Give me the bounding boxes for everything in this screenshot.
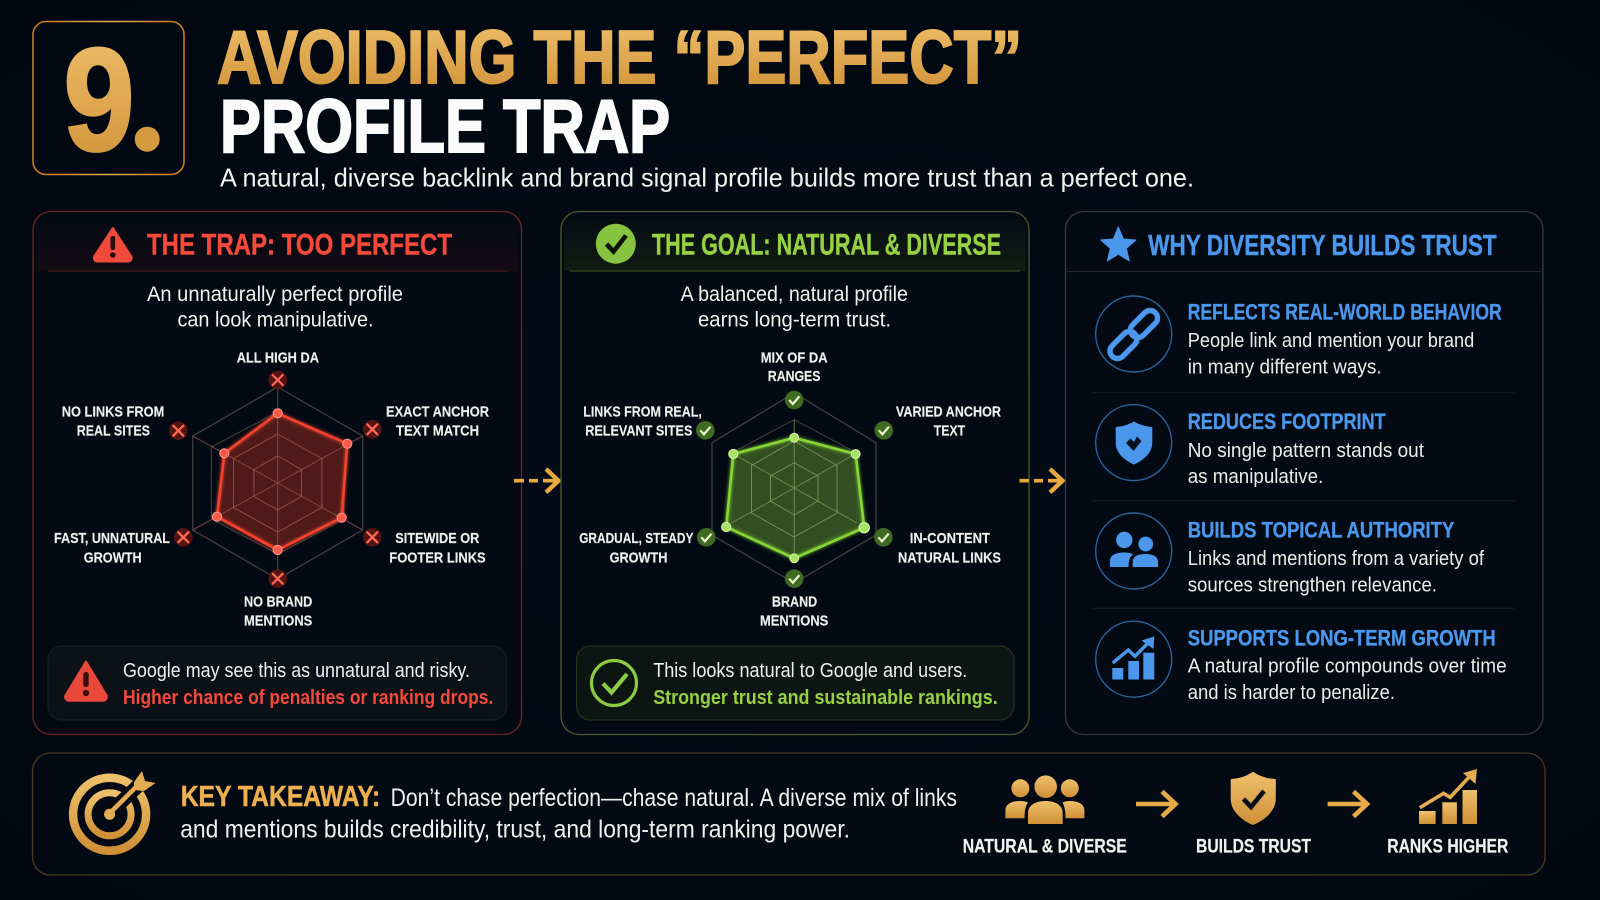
radar labels: MENTIONS	[760, 613, 828, 630]
item: builds topical authority: Links and mentions from a variety of	[1188, 547, 1484, 570]
heading: THE GOAL: NATURAL & DIVERSE	[652, 228, 1001, 261]
item: reflects real-world behavior: People link and mention your brand	[1188, 329, 1474, 352]
radar labels: GRADUAL, STEADY	[579, 530, 693, 547]
panel: why diversity builds trust	[1066, 212, 1543, 734]
icon: warning triangle	[94, 228, 132, 262]
arrow: to builds trust	[1136, 792, 1176, 816]
radar labels: FOOTER LINKS	[389, 549, 486, 566]
radar chart: too perfect	[193, 387, 363, 579]
x markers	[169, 371, 382, 588]
step: ranks higher	[1387, 769, 1509, 858]
intro text: An unnaturally perfect profile	[147, 283, 403, 306]
icon: star	[1101, 227, 1136, 261]
number badge: 9	[64, 18, 134, 181]
radar labels: REAL SITES	[77, 423, 150, 440]
title: PROFILE TRAP	[220, 84, 670, 168]
radar labels: NO BRAND	[244, 594, 312, 611]
title	[217, 15, 1022, 168]
item: builds topical authority: sources strengthen relevance.	[1188, 574, 1437, 597]
panel: key takeaway	[32, 753, 1545, 875]
icon: check circle	[596, 224, 636, 264]
step: natural and diverse	[963, 775, 1127, 858]
item: reduces footprint: REDUCES FOOTPRINT	[1188, 409, 1386, 434]
radar labels: EXACT ANCHOR	[386, 403, 489, 420]
item: reduces footprint	[1096, 405, 1424, 488]
item: reduces footprint: as manipulative.	[1188, 465, 1323, 488]
item: supports long-term growth: SUPPORTS LONG-TERM GROWTH	[1188, 625, 1496, 650]
item: builds topical authority	[1096, 513, 1484, 597]
callout: natural: This looks natural to Google and users.	[653, 660, 967, 682]
icon: growth chart	[1096, 621, 1172, 697]
radar labels: SITEWIDE OR	[395, 530, 479, 547]
step: builds trust	[1196, 772, 1311, 858]
radar labels: RANGES	[768, 368, 820, 385]
intro text: A balanced, natural profile	[681, 283, 908, 306]
step: builds trust: BUILDS TRUST	[1196, 837, 1311, 858]
number badge	[33, 18, 184, 181]
icon: chain link	[1096, 296, 1172, 372]
icon: target with arrow	[73, 771, 156, 851]
radar labels: IN-CONTENT	[910, 530, 990, 547]
radar labels: TEXT MATCH	[396, 423, 479, 440]
radar labels: RELEVANT SITES	[585, 423, 692, 440]
takeaway text: and mentions builds credibility, trust, and long-term ranking power.	[180, 815, 850, 843]
step: ranks higher: RANKS HIGHER	[1387, 837, 1509, 858]
callout: natural	[576, 646, 1014, 720]
radar labels: NO LINKS FROM	[62, 403, 164, 420]
item: builds topical authority: BUILDS TOPICAL AUTHORITY	[1188, 517, 1454, 542]
radar labels: BRAND	[772, 594, 817, 611]
item: supports long-term growth: and is harder to penalize.	[1188, 681, 1395, 704]
item: reflects real-world behavior	[1096, 296, 1502, 379]
radar labels	[54, 349, 489, 630]
radar labels: NATURAL LINKS	[898, 549, 1001, 566]
radar labels: MIX OF DA	[761, 349, 828, 366]
intro text: can look manipulative.	[178, 309, 374, 332]
item: reflects real-world behavior: REFLECTS REAL-WORLD BEHAVIOR	[1188, 300, 1502, 325]
check markers	[696, 391, 893, 588]
radar labels: TEXT	[934, 423, 965, 440]
heading: THE TRAP: TOO PERFECT	[147, 228, 452, 261]
radar labels: GROWTH	[610, 549, 667, 566]
intro text	[147, 283, 403, 332]
radar labels: FAST, UNNATURAL	[54, 530, 170, 547]
panel: the trap	[33, 212, 522, 734]
radar labels: VARIED ANCHOR	[896, 403, 1001, 420]
panel: the goal	[561, 212, 1029, 734]
callout: risk	[48, 646, 507, 720]
arrow: goal to why	[1020, 469, 1062, 492]
heading: WHY DIVERSITY BUILDS TRUST	[1148, 230, 1497, 262]
callout: risk: Higher chance of penalties or ranking drops.	[123, 687, 493, 709]
intro text	[681, 283, 908, 332]
radar labels: ALL HIGH DA	[237, 349, 319, 366]
item: supports long-term growth: A natural profile compounds over time	[1188, 655, 1507, 678]
icon: gold growth chart	[1419, 769, 1477, 824]
radar labels: MENTIONS	[244, 613, 312, 630]
icon: people group	[1005, 775, 1084, 824]
title: AVOIDING THE “PERFECT”	[217, 15, 1022, 99]
arrow: to ranks higher	[1328, 792, 1367, 816]
radar chart: natural	[712, 393, 876, 583]
subtitle: A natural, diverse backlink and brand signal profile builds more trust than a perfect one.	[220, 163, 1194, 193]
takeaway text: KEY TAKEAWAY:	[181, 781, 380, 813]
item: reflects real-world behavior: in many different ways.	[1188, 356, 1382, 379]
item: reduces footprint: No single pattern stands out	[1188, 439, 1424, 462]
takeaway text: Don’t chase perfection—chase natural. A diverse mix of links	[391, 784, 957, 812]
radar labels: GROWTH	[84, 549, 142, 566]
callout: risk: Google may see this as unnatural and risky.	[123, 660, 470, 682]
radar labels	[579, 349, 1001, 630]
takeaway text	[180, 781, 957, 843]
radar labels: LINKS FROM REAL,	[583, 403, 702, 420]
intro text: earns long-term trust.	[698, 309, 891, 332]
item: supports long-term growth	[1096, 621, 1507, 704]
step: natural and diverse: NATURAL & DIVERSE	[963, 837, 1127, 858]
icon: two people	[1096, 513, 1172, 589]
arrow: trap to goal	[514, 469, 558, 492]
icon: gold shield	[1231, 772, 1276, 825]
callout: natural: Stronger trust and sustainable rankings.	[653, 687, 998, 709]
icon: shield	[1096, 405, 1172, 481]
